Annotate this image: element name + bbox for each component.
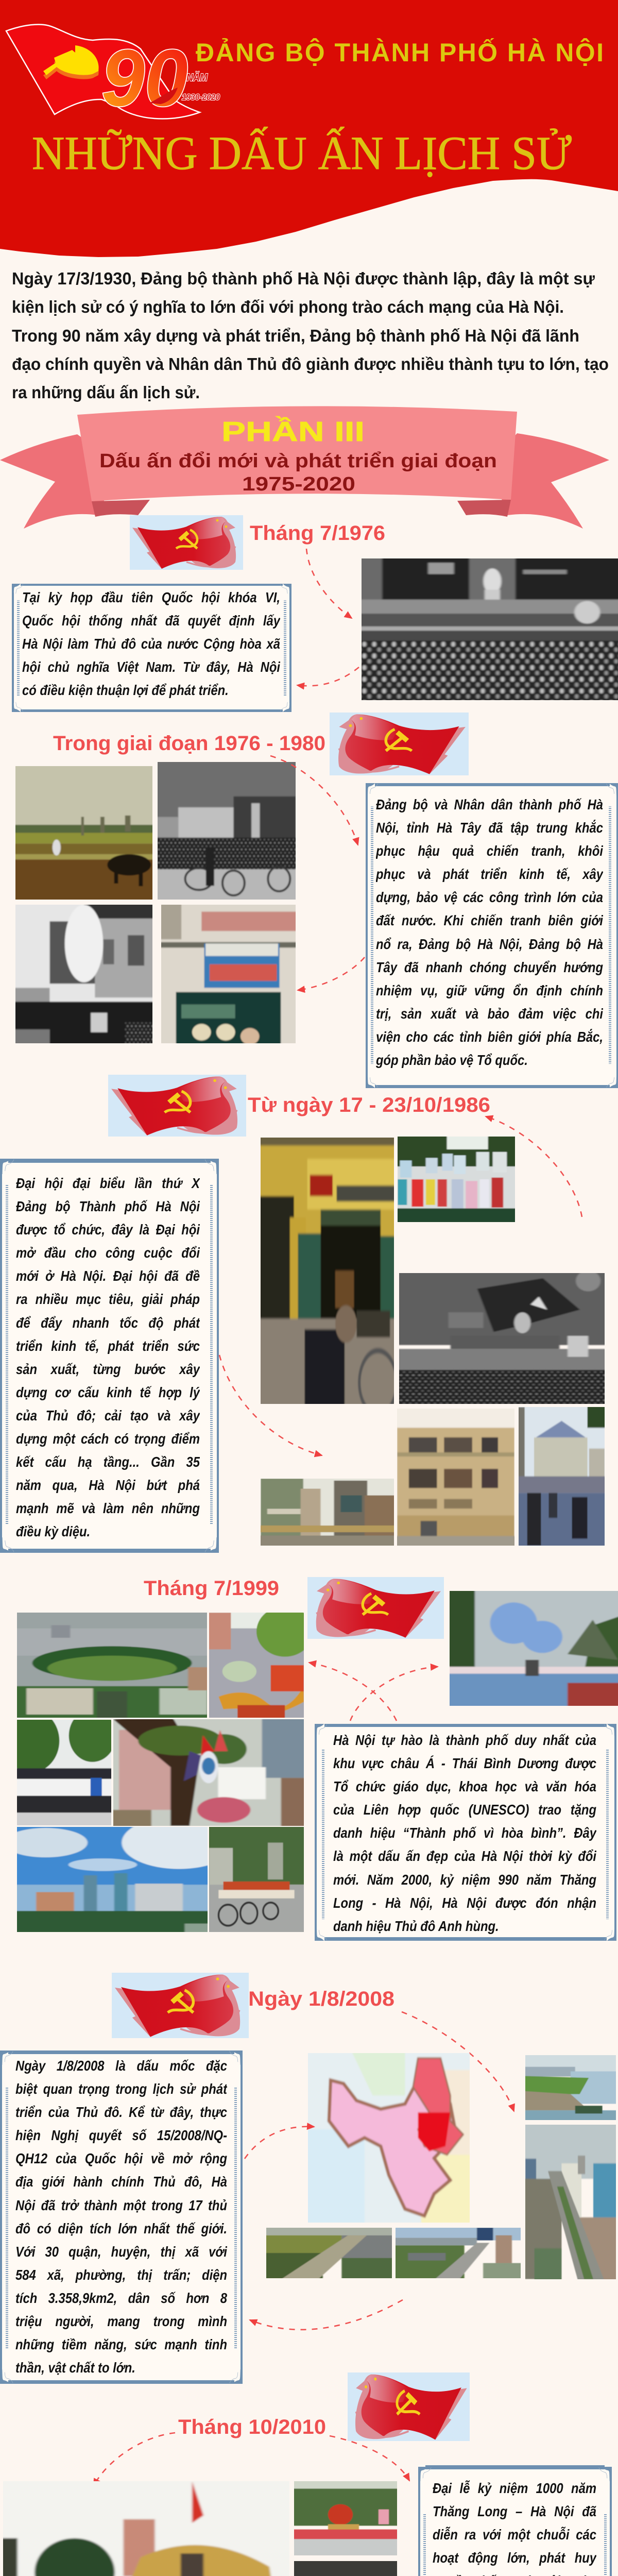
flag icon 1 — [130, 515, 243, 570]
map: Hanoi — [308, 2053, 470, 2223]
text: 2008: QH12 của Quốc hội về mở rộng — [15, 2150, 227, 2166]
panel: frame text 6 — [418, 2465, 612, 2576]
photo: national assembly — [362, 558, 618, 700]
text: 1986: ra nhiều mục tiêu, giải pháp — [16, 1291, 200, 1307]
arrow — [350, 1667, 438, 1721]
arrow — [330, 2436, 409, 2481]
text: 2008: thần, vật chất to lớn. — [15, 2360, 135, 2376]
photo: flags — [113, 1719, 304, 1826]
arrow — [245, 2127, 314, 2159]
text: 2008: hiện Nghị quyết số 15/2008/NQ- — [15, 2127, 227, 2143]
flag icon 3 — [108, 1075, 246, 1137]
title: NHỮNG DẤU ẤN LỊCH SỬ — [32, 127, 572, 179]
text: 1976-1980: dựng, bảo vệ các công trình lớn của — [376, 889, 603, 905]
text: 1999: mới. Năm 2000, kỷ niệm 990 năm Thăng — [333, 1872, 596, 1888]
section subtitle: 1975-2020 — [242, 473, 355, 495]
photo: old quarter houses — [261, 1479, 394, 1546]
text: 2008: tích 3.358,9km2, dân số hơn 8 — [15, 2290, 227, 2306]
text: 1976-1980: Đảng bộ và Nhân dân thành phố Hà — [376, 796, 603, 812]
text: 1986: năm qua, Hà Nội bứt phá — [16, 1477, 200, 1493]
photo: emblem float — [294, 2481, 397, 2555]
text: 1976-1980: Nội, tỉnh Hà Tây đã tập trung khắc — [376, 820, 603, 836]
heading: Tháng 7/1999: Tháng 7/1999 — [144, 1577, 279, 1600]
text: 2008 — [15, 2054, 227, 2381]
photo: 1000 years ceremony — [3, 2481, 289, 2576]
text: 1976-1980: phục và phát triển kinh tế, xây — [376, 866, 603, 882]
text: 2008: triệu người, mang trong mình — [15, 2313, 227, 2329]
text: 2008: đô có diện tích lớn nhất thế giới. — [15, 2221, 227, 2236]
panel: frame text 4 — [315, 1724, 616, 1941]
photo: expressway — [266, 2228, 392, 2278]
intro text — [12, 269, 609, 402]
photo: bicycles — [209, 1827, 304, 1932]
text: 1999 — [333, 1728, 596, 1940]
logo caption — [182, 72, 220, 102]
flag icon 6 — [348, 2372, 470, 2441]
text: 1976-1980: nổ ra, Đảng bộ Hà Nội, Đảng bộ Hà — [376, 936, 603, 952]
text: 1976-1980: trị, sản xuất và bảo đảm việc chi — [376, 1006, 603, 1022]
text: 2010: hoạt động lớn, phát huy — [433, 2550, 596, 2566]
logo caption: 1930-2020 — [182, 92, 220, 102]
text: 1986: dựng cơ cấu kinh tế hợp lý — [16, 1384, 200, 1400]
photo: market crowd — [158, 762, 296, 900]
arrow — [270, 756, 358, 845]
text: 2008: biệt quan trọng trong lịch sử phát — [15, 2081, 227, 2097]
arrow — [309, 1663, 397, 1721]
text: Tháng 7/1976: có điều kiện thuận lợi để phát triển. — [22, 682, 229, 698]
text: 1986: sản xuất, từng bước xây — [16, 1361, 200, 1377]
logo: 90 years flag — [6, 25, 220, 123]
text: 1986: Đại hội đại biểu lần thứ X — [16, 1175, 200, 1191]
heading: 1/8/2008: Ngày 1/8/2008 — [248, 1988, 394, 2010]
photo: parade float — [294, 2561, 397, 2576]
text: 1999: Long - Hà Nội, Hà Nội được đón nhận — [333, 1895, 596, 1911]
number 90: 90 — [101, 33, 188, 123]
text: 1986: để đẩy nhanh tốc độ phát — [16, 1315, 200, 1331]
text: 1986: mạnh mẽ và làm nên những — [16, 1500, 200, 1516]
heading: 10/2010: Tháng 10/2010 — [178, 2416, 326, 2438]
panel: frame text 3 — [0, 1159, 219, 1553]
panel: frame text 2 — [366, 783, 618, 1088]
flag icon 2 — [330, 713, 469, 775]
photo: boulevard — [525, 2125, 616, 2279]
photo: museum avenue — [396, 2228, 521, 2278]
photo: farming — [15, 766, 152, 900]
text: 1976-1980: đất nước. Khi chiến tranh biên giới — [376, 912, 603, 928]
photo: dragon dance — [209, 1613, 304, 1718]
text: 1976-1980 — [376, 793, 603, 1076]
text: 1986: điều kỳ diệu. — [16, 1523, 90, 1539]
text: 1976-1980: nhiệm vụ, giữ vững ổn định chính — [376, 982, 603, 998]
heading: 1976-1980: Trong giai đoạn 1976 - 1980 — [53, 732, 325, 755]
text: 1999: là một dấu ấn đẹp của Hà Nội thời kỳ đổi — [333, 1848, 596, 1864]
photo: balloons — [450, 1591, 618, 1706]
panel: frame text 5 — [0, 2050, 243, 2384]
photo: congress — [399, 1273, 605, 1404]
arrow — [250, 2300, 403, 2330]
text: 1999: danh hiệu Thủ đô Anh hùng. — [333, 1918, 499, 1934]
text: 2008: Với 30 quận, huyện, thị xã với — [15, 2244, 227, 2260]
arrow — [94, 2433, 175, 2486]
photo: opera house street — [519, 1407, 605, 1546]
text: 1986: triển kinh tế, phát triển sức — [16, 1338, 200, 1354]
text: 1986: kết cấu hạ tầng... Gần 35 — [16, 1454, 200, 1470]
intro text: đạo chính quyền và Nhân dân Thủ đô giành được nhiều thành tựu to lớn, tạo — [12, 354, 609, 374]
text: 1986: dựng một cách có trọng điểm — [16, 1431, 200, 1447]
logo caption: NĂM — [186, 72, 208, 83]
text: 1976-1980: Tây đã nhanh chóng chuyển hướng — [376, 959, 603, 975]
photo: store — [161, 905, 296, 1043]
photo: modern buildings — [17, 1827, 208, 1932]
intro text: kiện lịch sử có ý nghĩa to lớn đối với phong trào cách mạng của Hà Nội. — [12, 297, 564, 316]
photo: train — [15, 905, 152, 1043]
text: 1976-1980: phục hậu quả chiến tranh, khôi — [376, 843, 603, 859]
heading: Tháng 7/1976: Tháng 7/1976 — [250, 522, 385, 545]
text: 2010: diễn ra với một chuỗi các — [433, 2527, 596, 2543]
section subtitle — [99, 450, 497, 495]
photo: parade — [398, 1137, 515, 1222]
text: Tháng 7/1976 — [22, 586, 280, 709]
intro text: Trong 90 năm xây dựng và phát triển, Đảng bộ thành phố Hà Nội đã lãnh — [12, 326, 579, 345]
text: 1999: của Liên hợp quốc (UNESCO) trao tặng — [333, 1802, 596, 1818]
text: 1999: Hà Nội tự hào là thành phố duy nhất của — [333, 1732, 596, 1748]
heading: party committee: ĐẢNG BỘ THÀNH PHỐ HÀ NỘI — [196, 38, 604, 67]
text: 2010: Thăng Long – Hà Nội đã — [433, 2503, 596, 2519]
text: 1976-1980: viện cho các tỉnh biên giới phía Bắc, — [376, 1029, 603, 1045]
panel: frame text 1 — [12, 584, 291, 712]
text: 2010 — [433, 2477, 596, 2576]
arrow — [297, 667, 359, 686]
flag icon 5 — [112, 1973, 249, 2038]
arrow — [486, 1116, 582, 1217]
photo: electric repair shop — [261, 1138, 394, 1404]
section label: PHẦN III — [221, 416, 365, 447]
text: 2010: Đại lễ kỷ niệm 1000 năm — [433, 2480, 596, 2496]
arrow — [402, 2012, 514, 2111]
text: 1999: Tổ chức giáo dục, khoa học và văn hóa — [333, 1778, 596, 1794]
section subtitle: Dấu ấn đổi mới và phát triển giai đoạn — [99, 450, 497, 472]
photo: Hoan Kiem lake — [17, 1613, 207, 1718]
intro text: ra những dấu ấn lịch sử. — [12, 383, 200, 402]
text: 1986: được tổ chức, đây là Đại hội — [16, 1222, 200, 1238]
text: Tháng 7/1976: Hà Nội làm Thủ đô của nước Cộng hòa xã — [22, 636, 280, 652]
text: 2008: 584 xã, phường, thị trấn; diện — [15, 2267, 227, 2283]
text: 1976-1980: góp phần bảo vệ Tổ quốc. — [376, 1052, 528, 1068]
text: 1986 — [16, 1172, 200, 1545]
text: 2008: địa giới hành chính Thủ đô, Hà — [15, 2174, 227, 2190]
arrow — [298, 957, 365, 990]
arrow — [306, 549, 352, 618]
text: 1986: mở đầu cho công cuộc đổi — [16, 1245, 200, 1261]
photo: West Lake — [525, 2055, 616, 2120]
flag icon 4 — [307, 1577, 444, 1639]
text: 1986: Đảng bộ Thành phố Hà Nội — [16, 1198, 200, 1214]
text: 2008: Nội đã trở thành một trong 17 thủ — [15, 2197, 227, 2213]
arrow — [219, 1355, 322, 1455]
text: 2008: những tiềm năng, sức mạnh tinh — [15, 2336, 227, 2352]
photo: runners — [17, 1720, 111, 1825]
text: Tháng 7/1976: hội chủ nghĩa Việt Nam. Từ đây, Hà Nội — [22, 659, 280, 675]
red header banner — [0, 0, 618, 257]
text: 1999: khu vực châu Á - Thái Bình Dương được — [333, 1755, 596, 1771]
intro text: Ngày 17/3/1930, Đảng bộ thành phố Hà Nội được thành lập, đây là một sự — [12, 269, 595, 288]
text: 1986: của Thủ đô; cải tạo và xây — [16, 1408, 200, 1423]
text: Tháng 7/1976: Quốc hội thống nhất đã quyết định lấy — [22, 613, 280, 629]
text: 1986: mới ở Hà Nội. Đại hội đã đề — [16, 1268, 200, 1284]
text: 2008: triển của Thủ đô. Kể từ đây, thực — [15, 2104, 227, 2120]
text: 2008: Ngày 1/8/2008 là dấu mốc đặc — [15, 2058, 227, 2074]
text: Tháng 7/1976: Tại kỳ họp đầu tiên Quốc hội khóa VI, — [22, 589, 280, 605]
photo: apartment block — [397, 1409, 514, 1546]
text: 1999: danh hiệu “Thành phố vì hòa bình”. Đây — [333, 1825, 596, 1841]
heading: 1986: Từ ngày 17 - 23/10/1986 — [248, 1094, 490, 1116]
ribbon section banner — [0, 406, 609, 529]
